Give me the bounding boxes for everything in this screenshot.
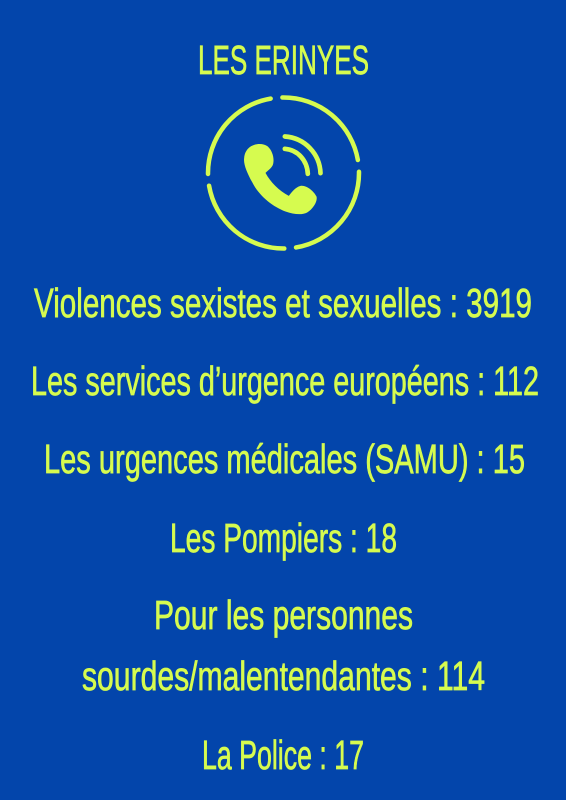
text: police number: La Police : 17 (202, 732, 364, 778)
text: deaf and hard of hearing number: Pour les personnes (154, 592, 413, 638)
title: LES ERINYES (198, 37, 369, 83)
text: firefighters number: Les Pompiers : 18 (170, 515, 397, 561)
text: deaf and hard of hearing number (82, 592, 485, 699)
icon: phone handset and signal waves (244, 136, 320, 214)
icon: dashed circle ring (207, 97, 360, 249)
icon: phone in dashed circle (207, 97, 360, 249)
